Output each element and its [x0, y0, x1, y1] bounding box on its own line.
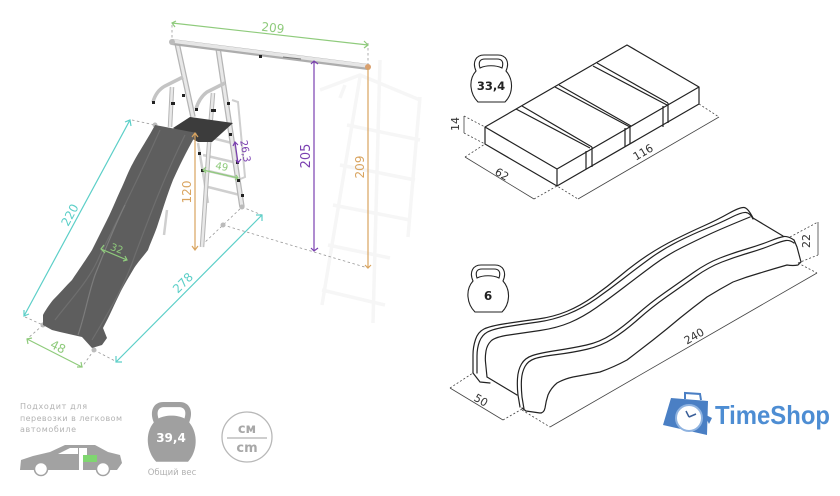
- total weight label: Общий вес: [148, 468, 197, 478]
- swing frame: [40, 39, 371, 352]
- slide dimensions: 22: [800, 234, 813, 248]
- car transport note: Подходит для: [20, 402, 87, 411]
- icon: units cm: см: [238, 422, 256, 437]
- platform: [173, 117, 233, 142]
- dimension 205: 205: [299, 144, 314, 168]
- dimension 220: 220: [58, 202, 82, 228]
- gray slide: [43, 125, 197, 348]
- package dimensions: 62: [492, 165, 511, 184]
- dimension 278: 278: [170, 270, 196, 296]
- dimension 120: 120: [180, 181, 194, 203]
- icon: package weight 33,4: [471, 55, 512, 102]
- package box drawing: [485, 45, 699, 186]
- slide line drawing: [473, 207, 801, 413]
- dimension 209 width: [172, 20, 368, 48]
- dimension 32: [101, 242, 127, 261]
- dimension 205: [299, 61, 318, 251]
- icon: package weight 33,4: 33,4: [477, 79, 505, 93]
- icon: slide weight 6: 6: [484, 289, 492, 303]
- car transport note: автомобиле: [20, 425, 76, 434]
- car transport note: перевозки в легковом: [20, 414, 122, 423]
- dimension 49: [203, 161, 238, 180]
- package dimensions: [449, 104, 719, 199]
- slide dimensions: 50: [471, 391, 490, 410]
- slide dimensions: [450, 222, 818, 427]
- car transport note: [20, 402, 122, 434]
- dimension 209 height: 209: [353, 156, 367, 178]
- dimension 120: [180, 133, 198, 250]
- icon: total weight kettlebell: 39,4: [156, 431, 186, 445]
- icon: total weight kettlebell: [148, 402, 196, 462]
- ghost wall bars: [320, 60, 420, 323]
- icon: units cm: [222, 412, 272, 462]
- dimension 32: 32: [109, 242, 124, 257]
- icon: clock bag: [663, 393, 712, 435]
- dimension 278: [116, 215, 262, 362]
- top bar: [172, 42, 368, 67]
- dimension 26,3: 26,3: [237, 139, 252, 163]
- package dimensions: 116: [631, 142, 656, 163]
- icon: slide weight 6: [468, 265, 509, 312]
- dimension 48: [27, 337, 82, 367]
- icon: car: [20, 445, 122, 476]
- dimension 49: 49: [214, 161, 229, 174]
- slide dimensions: 240: [682, 326, 707, 347]
- dimension 209 height: [353, 68, 371, 268]
- logo: TimeShop: [663, 393, 830, 435]
- dimension 48: 48: [48, 337, 68, 357]
- handrails: [153, 77, 225, 109]
- logo: TimeShop: TimeShop: [715, 400, 830, 430]
- dimension 220: [24, 120, 131, 316]
- bolts: [152, 55, 262, 197]
- uprights: [170, 43, 242, 247]
- ladder and side rails: [164, 100, 245, 235]
- icon: units cm: cm: [236, 441, 258, 456]
- dashed guide lines: [25, 25, 368, 367]
- package dimensions: 14: [449, 117, 462, 131]
- dimension 209 width: 209: [261, 20, 285, 36]
